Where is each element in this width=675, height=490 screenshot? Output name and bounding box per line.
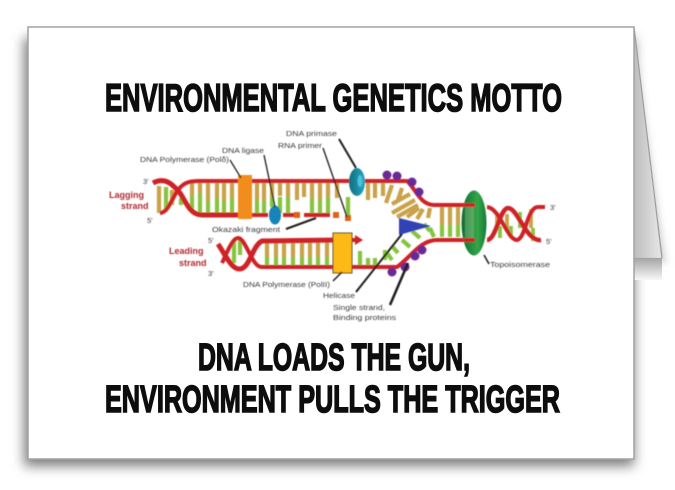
diagram labels: Okazaki fragment xyxy=(212,225,281,234)
diagram labels: DNA primase xyxy=(286,129,337,138)
diagram labels: Single strand, xyxy=(333,303,385,312)
DNA polymerase (Pol delta) block xyxy=(238,175,252,219)
single strand binding proteins xyxy=(382,170,426,276)
diagram labels: Helicase xyxy=(323,291,355,300)
DNA polymerase (Pol III) block xyxy=(333,233,352,273)
diagram labels: RNA primer xyxy=(278,141,323,150)
leading strand bases xyxy=(234,240,327,265)
topoisomerase ring xyxy=(462,190,486,256)
helicase xyxy=(399,218,431,235)
diagram labels: Binding proteins xyxy=(333,313,396,322)
diagram labels: 5' xyxy=(147,216,153,225)
diagram labels: 3' xyxy=(143,177,149,186)
diagram labels xyxy=(140,129,556,322)
lagging strand label: strand xyxy=(121,201,149,211)
leading strand label: strand xyxy=(179,258,207,268)
diagram labels: DNA ligase xyxy=(222,146,264,155)
diagram labels: 3' xyxy=(208,269,214,278)
fork upper bases xyxy=(386,185,467,225)
Okazaki fragment caps xyxy=(294,212,351,221)
leader lines xyxy=(230,139,489,305)
diagram labels: Topoisomerase xyxy=(490,260,550,269)
leading strand label: Leading xyxy=(169,246,204,256)
DNA ligase xyxy=(269,206,281,224)
motto line 1: DNA LOADS THE GUN, xyxy=(198,337,470,379)
back fold of card xyxy=(634,27,662,258)
card front xyxy=(28,27,634,459)
lagging strand label xyxy=(109,190,149,211)
diagram labels: DNA Polymerase (Polδ) xyxy=(140,155,230,164)
diagram labels: 3' xyxy=(550,203,556,212)
diagram: DNA replication fork xyxy=(109,129,556,322)
lagging strand base pairs xyxy=(159,183,383,215)
red strands xyxy=(153,181,545,269)
lagging strand label: Lagging xyxy=(109,190,144,200)
leading strand label xyxy=(169,246,207,268)
diagram labels: 5' xyxy=(208,236,214,245)
arrow: leading strand direction xyxy=(355,235,363,245)
DNA primase xyxy=(349,168,365,196)
diagram labels: DNA Polymerase (PolII) xyxy=(243,280,331,289)
diagram labels: 5' xyxy=(546,237,552,246)
right helix bases xyxy=(497,209,533,241)
